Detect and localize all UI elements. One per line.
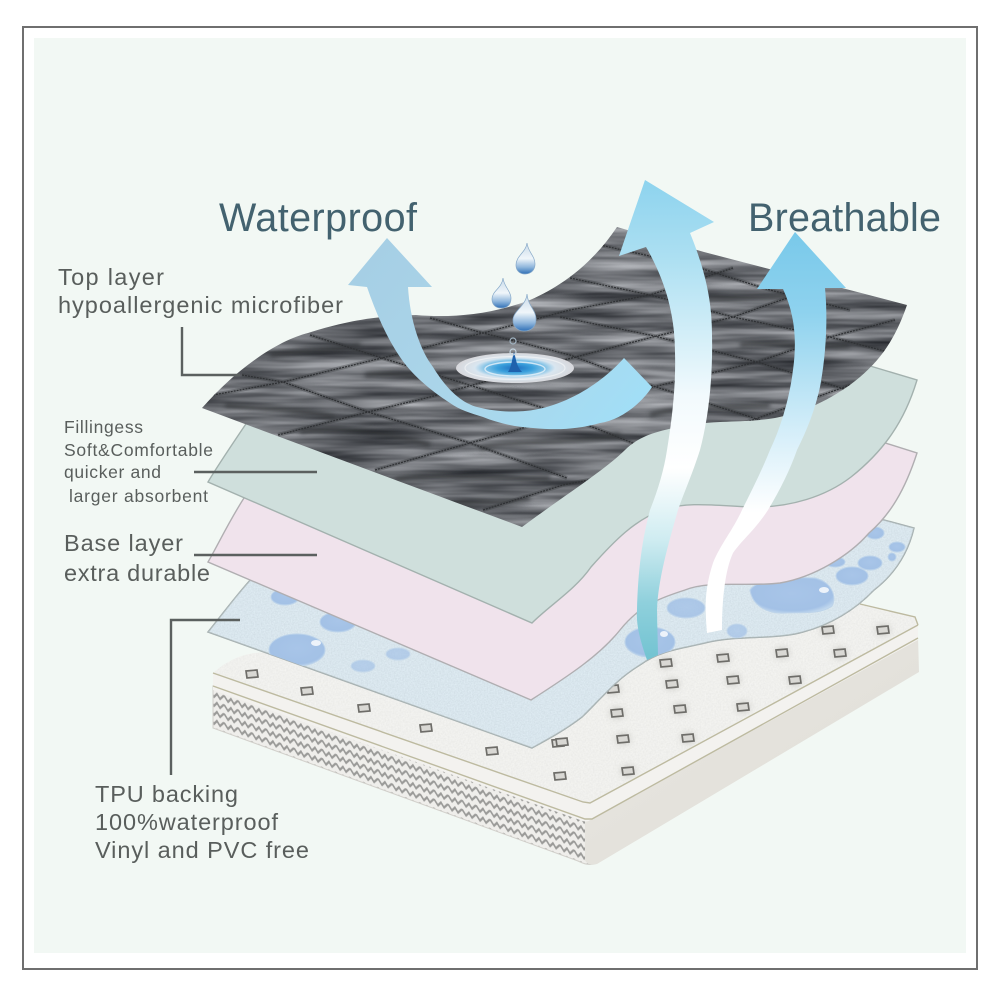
label: TPU backing: Vinyl and PVC free bbox=[95, 837, 309, 863]
quilt seams shadow bbox=[213, 245, 900, 510]
mattress quilted top surface bbox=[213, 604, 918, 803]
heading: Breathable: Breathable bbox=[748, 196, 941, 240]
label: TPU backing: TPU backing bbox=[95, 781, 238, 807]
mattress tufts bbox=[246, 626, 889, 780]
label: filling: larger absorbent bbox=[69, 486, 208, 506]
mattress bbox=[200, 600, 930, 865]
label: filling: Soft&Comfortable bbox=[64, 440, 213, 460]
label: filling: Fillingess bbox=[64, 417, 143, 437]
dark folds bbox=[225, 295, 850, 505]
quilt seams bbox=[213, 245, 900, 510]
filling layer sage bbox=[208, 360, 917, 623]
leader line: filling bbox=[194, 471, 317, 473]
mattress pillow band bbox=[213, 623, 918, 822]
TPU backing layer with water beads bbox=[206, 519, 915, 749]
mattress right side bbox=[585, 636, 919, 865]
mattress left side with zigzag bbox=[213, 686, 597, 864]
label: top layer: Top layer bbox=[58, 264, 164, 290]
label: base layer: extra durable bbox=[64, 560, 210, 586]
tuft soft shadows bbox=[607, 626, 889, 775]
water beads bbox=[269, 527, 905, 672]
leader line: base layer bbox=[194, 554, 317, 556]
mattress piping bbox=[213, 604, 918, 819]
leader line: TPU backing bbox=[171, 620, 240, 775]
right breathable arrow bbox=[706, 232, 846, 633]
label: TPU backing: 100%waterproof bbox=[95, 809, 278, 835]
falling water drops bbox=[492, 243, 536, 331]
leader line: top layer bbox=[182, 327, 240, 375]
heading: Waterproof: Waterproof bbox=[219, 196, 418, 240]
label: top layer: hypoallergenic microfiber bbox=[58, 292, 343, 318]
top layer quilted grey microfiber bbox=[195, 220, 915, 535]
base layer pink bbox=[208, 435, 917, 700]
central breathable arrow bbox=[619, 180, 714, 660]
label: base layer: Base layer bbox=[64, 530, 183, 556]
label: filling: quicker and bbox=[64, 462, 161, 482]
waterproof curved arrow bbox=[348, 238, 652, 429]
water ripple bbox=[456, 338, 574, 383]
